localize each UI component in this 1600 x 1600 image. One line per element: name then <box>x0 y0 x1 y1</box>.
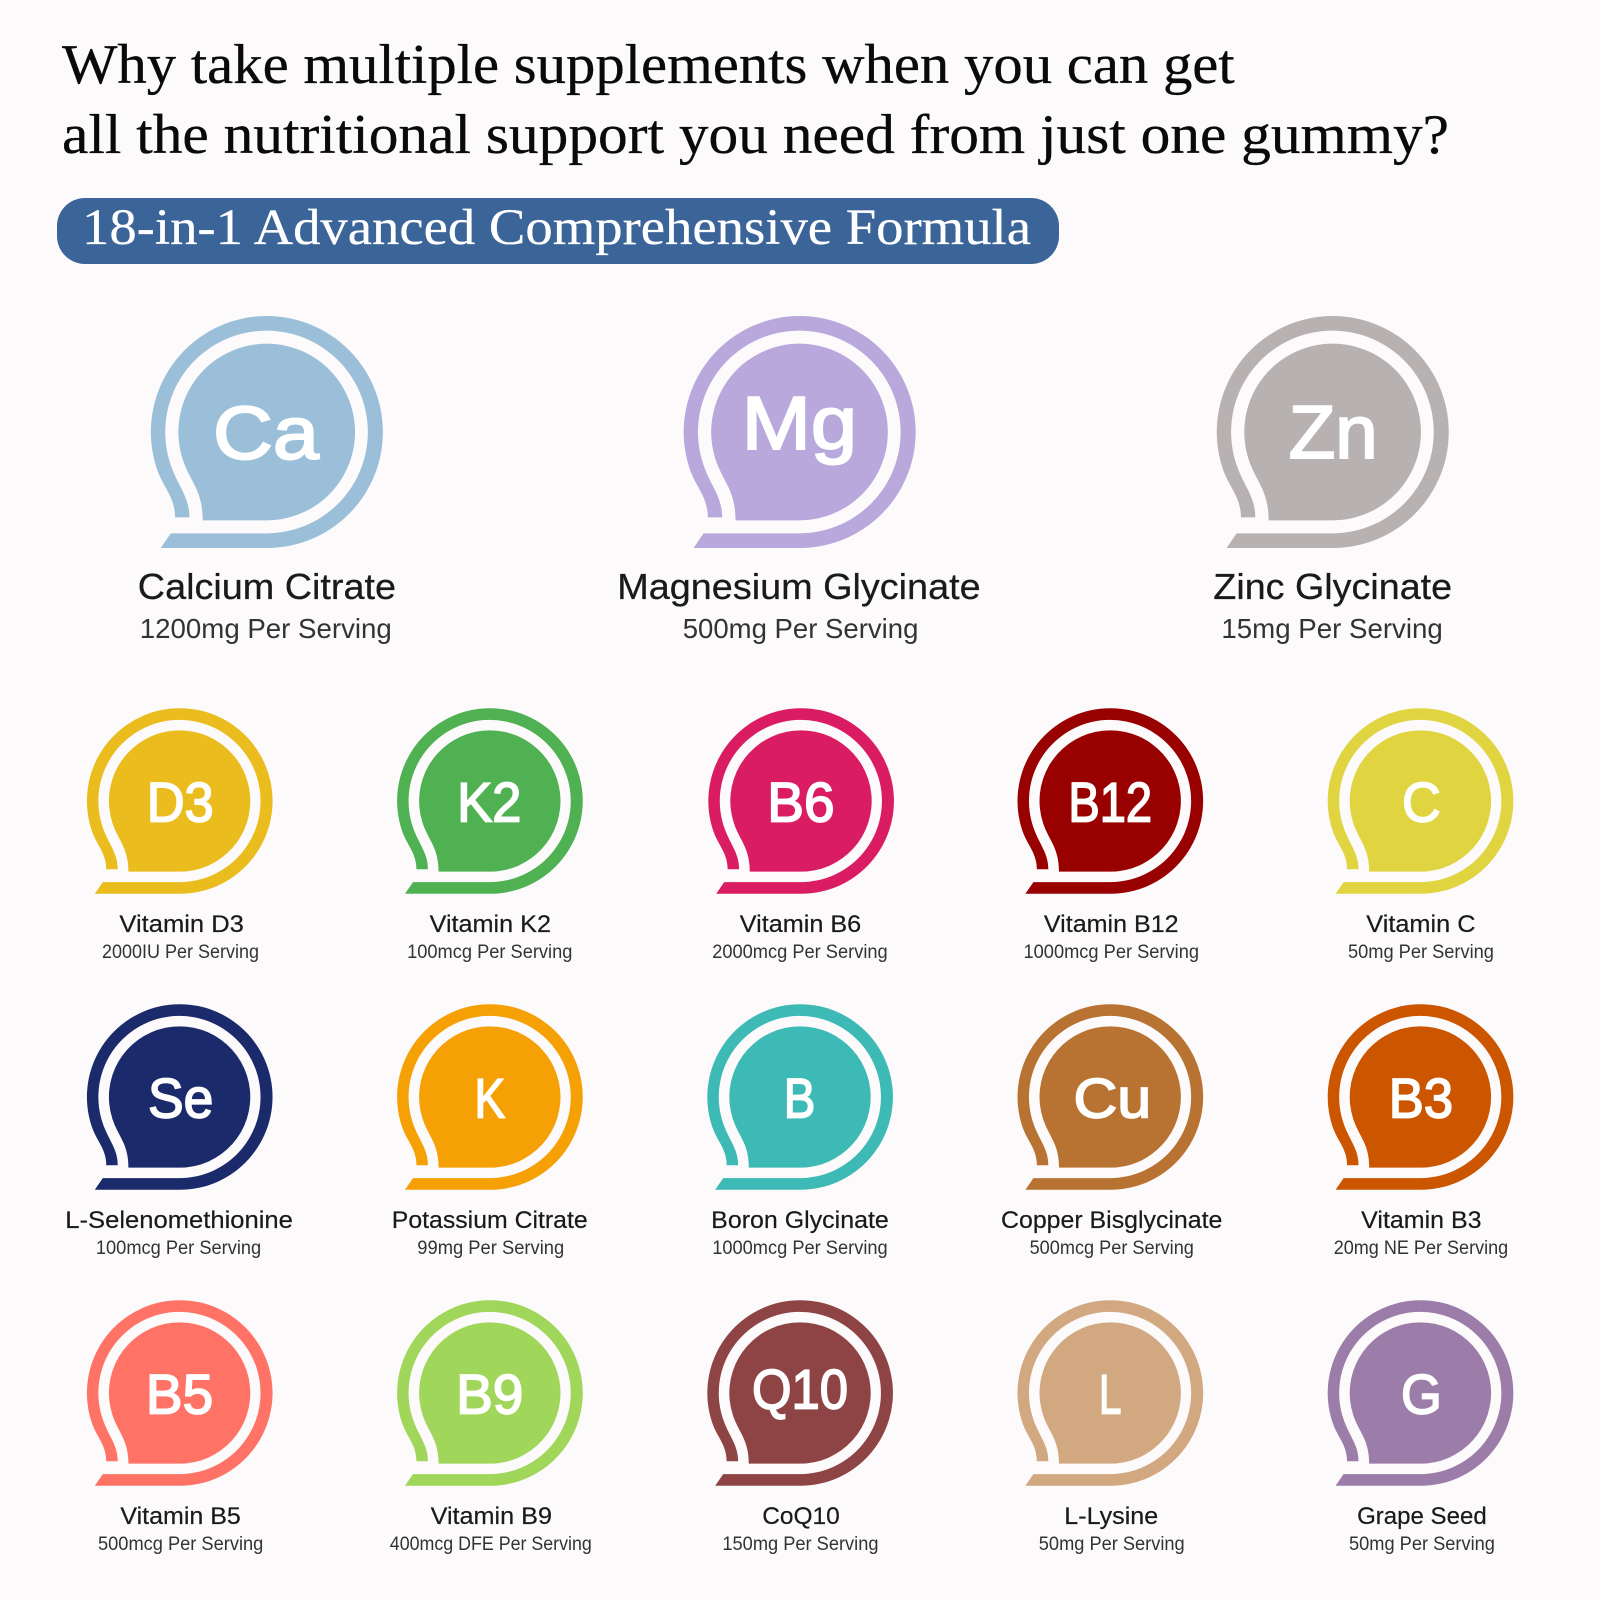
item: Vitamin B6: B6 <box>767 770 835 834</box>
item: Grape Seed: 50mg Per Serving <box>1349 1534 1495 1555</box>
item: Vitamin B9 <box>390 1300 592 1555</box>
item: Vitamin B6: Vitamin B6 <box>740 911 861 938</box>
item: Grape Seed: G <box>1401 1362 1442 1426</box>
item: Vitamin D3: 2000IU Per Serving <box>102 942 259 963</box>
item: Calcium Citrate <box>138 316 396 644</box>
item: Magnesium Glycinate <box>617 316 981 644</box>
item: Vitamin K2: 100mcg Per Serving <box>407 942 572 963</box>
subtitle pill: 18-in-1 Advanced Comprehensive Formula <box>82 200 1031 256</box>
item: Vitamin D3 <box>87 708 273 963</box>
item: CoQ10: Q10 <box>752 1358 848 1420</box>
item: L-Lysine: 50mg Per Serving <box>1039 1534 1185 1555</box>
item: Potassium Citrate: 99mg Per Serving <box>417 1238 564 1259</box>
item: Grape Seed <box>1328 1300 1513 1555</box>
item: Vitamin B5: Vitamin B5 <box>120 1503 241 1530</box>
item: Copper Bisglycinate: Cu <box>1074 1066 1151 1130</box>
item: Vitamin B5 <box>87 1300 273 1555</box>
item: Vitamin C <box>1328 708 1513 963</box>
item: Vitamin B12: Vitamin B12 <box>1044 911 1179 938</box>
item: Vitamin B6: 2000mcg Per Serving <box>712 942 888 963</box>
item: Vitamin C: 50mg Per Serving <box>1348 942 1494 963</box>
item: Boron Glycinate: 1000mcg Per Serving <box>712 1238 888 1259</box>
item: L-Selenomethionine: Se <box>148 1066 213 1130</box>
item: CoQ10: CoQ10 <box>762 1503 840 1530</box>
item: Vitamin K2 <box>397 708 583 963</box>
item: Boron Glycinate: B <box>784 1066 815 1130</box>
item: Potassium Citrate: K <box>474 1066 505 1130</box>
item: Potassium Citrate: Potassium Citrate <box>392 1207 588 1234</box>
item: Vitamin B3 <box>1328 1004 1513 1259</box>
item: Vitamin B5: B5 <box>146 1362 213 1426</box>
item: Boron Glycinate: Boron Glycinate <box>711 1207 889 1234</box>
item: Zinc Glycinate: Zn <box>1289 390 1378 474</box>
item: Vitamin C: C <box>1402 770 1441 834</box>
item: Zinc Glycinate: 15mg Per Serving <box>1221 613 1443 644</box>
item: Calcium Citrate: Ca <box>213 391 319 475</box>
item: Copper Bisglycinate <box>1001 1004 1222 1259</box>
item: L-Lysine: L <box>1099 1362 1121 1426</box>
item: Zinc Glycinate: Zinc Glycinate <box>1213 566 1452 607</box>
item: L-Lysine: L-Lysine <box>1064 1503 1158 1530</box>
item: Copper Bisglycinate: Copper Bisglycinate <box>1001 1207 1222 1234</box>
item: Copper Bisglycinate: 500mcg Per Serving <box>1030 1238 1194 1259</box>
item: Magnesium Glycinate: Mg <box>742 381 857 465</box>
item: CoQ10 <box>707 1300 893 1555</box>
item: Magnesium Glycinate: Magnesium Glycinate <box>617 566 981 607</box>
item: L-Lysine <box>1018 1300 1203 1555</box>
item: Boron Glycinate <box>707 1004 893 1259</box>
item: Calcium Citrate: Calcium Citrate <box>138 566 396 607</box>
item: Zinc Glycinate <box>1213 316 1452 644</box>
item: Vitamin B9: B9 <box>456 1362 523 1426</box>
item: Vitamin K2: Vitamin K2 <box>430 911 551 938</box>
title <box>62 34 1449 166</box>
item: Magnesium Glycinate: 500mg Per Serving <box>683 613 918 644</box>
item: Vitamin K2: K2 <box>457 770 521 834</box>
item: L-Selenomethionine: L-Selenomethionine <box>65 1207 293 1234</box>
title: Why take multiple supplements when you can get <box>62 34 1235 96</box>
title: all the nutritional support you need from just one gummy? <box>62 104 1449 166</box>
item: Vitamin D3: D3 <box>147 770 214 834</box>
item: Vitamin B12: 1000mcg Per Serving <box>1024 942 1199 963</box>
item: Vitamin B6 <box>708 708 894 963</box>
item: CoQ10: 150mg Per Serving <box>722 1534 878 1555</box>
item: Potassium Citrate <box>392 1004 588 1259</box>
item: Vitamin C: Vitamin C <box>1366 911 1476 938</box>
item: Vitamin B9: 400mcg DFE Per Serving <box>390 1534 592 1555</box>
item: Calcium Citrate: 1200mg Per Serving <box>140 613 392 644</box>
item: Vitamin B5: 500mcg Per Serving <box>98 1534 263 1555</box>
item: Grape Seed: Grape Seed <box>1357 1503 1487 1530</box>
item: Vitamin B3: B3 <box>1389 1066 1453 1130</box>
item: Vitamin B12 <box>1018 708 1203 963</box>
item: Vitamin B9: Vitamin B9 <box>431 1503 552 1530</box>
item: L-Selenomethionine: 100mcg Per Serving <box>96 1238 261 1259</box>
item: Vitamin B3: Vitamin B3 <box>1361 1207 1482 1234</box>
item: L-Selenomethionine <box>65 1004 293 1259</box>
item: Vitamin D3: Vitamin D3 <box>119 911 244 938</box>
item: Vitamin B12: B12 <box>1068 770 1152 834</box>
item: Vitamin B3: 20mg NE Per Serving <box>1334 1238 1508 1259</box>
